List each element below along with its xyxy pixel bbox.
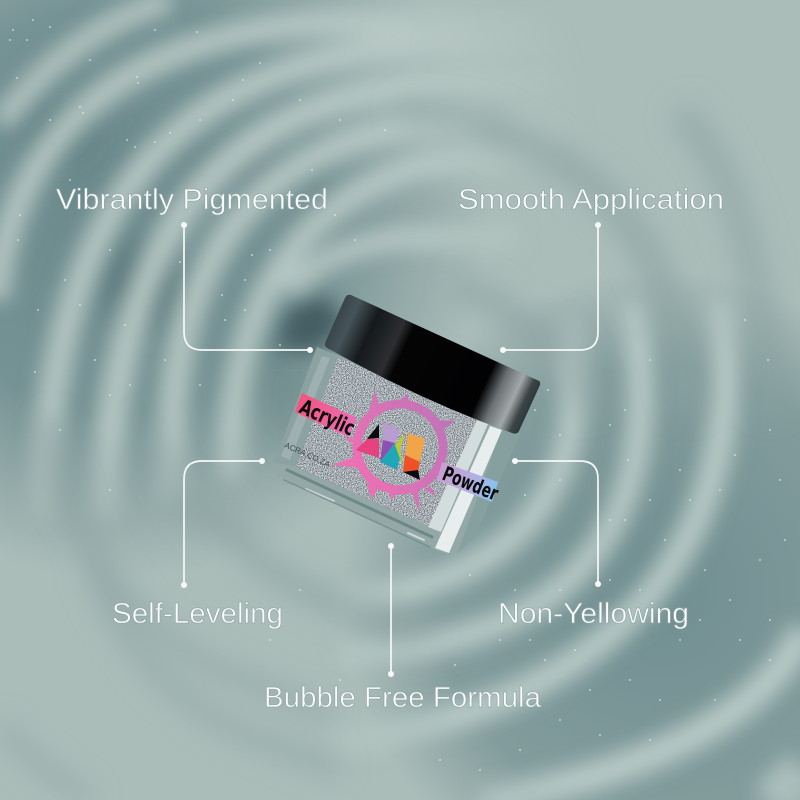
logo: geometric faceted mark [356, 422, 425, 480]
jar right glass wall [458, 428, 520, 552]
icon: jar of acrylic powder [274, 295, 540, 554]
pink splash ring [332, 391, 456, 512]
callout: Vibrantly Pigmented [56, 184, 328, 353]
callout: Bubble Free Formula [264, 543, 542, 714]
callout: Smooth Application: Smooth Application [458, 184, 724, 216]
pink band: Acrylic [295, 393, 359, 441]
callout: Non-Yellowing: Non-Yellowing [498, 598, 689, 630]
callout: Vibrantly Pigmented: Vibrantly Pigmented [56, 184, 328, 216]
jar left glass wall [274, 347, 338, 466]
callout: Self-Leveling [112, 458, 283, 630]
jar lid [325, 295, 540, 434]
callout: Self-Leveling: Self-Leveling [112, 598, 283, 630]
blue band: Powder: Powder [439, 461, 502, 505]
small jar url text: ACRA.CO.ZA [283, 441, 332, 469]
pink band: Acrylic: Acrylic [296, 395, 359, 441]
jar left wall light streak [281, 356, 330, 460]
jar glass body [274, 347, 520, 554]
callout: Non-Yellowing [498, 458, 689, 630]
callout: Smooth Application [458, 184, 724, 353]
callout: Bubble Free Formula: Bubble Free Formula [264, 682, 542, 714]
blue band: Powder [437, 461, 502, 505]
glitter powder fill [296, 358, 477, 526]
jar glass base rim [284, 470, 432, 547]
white label stripes [428, 420, 502, 553]
